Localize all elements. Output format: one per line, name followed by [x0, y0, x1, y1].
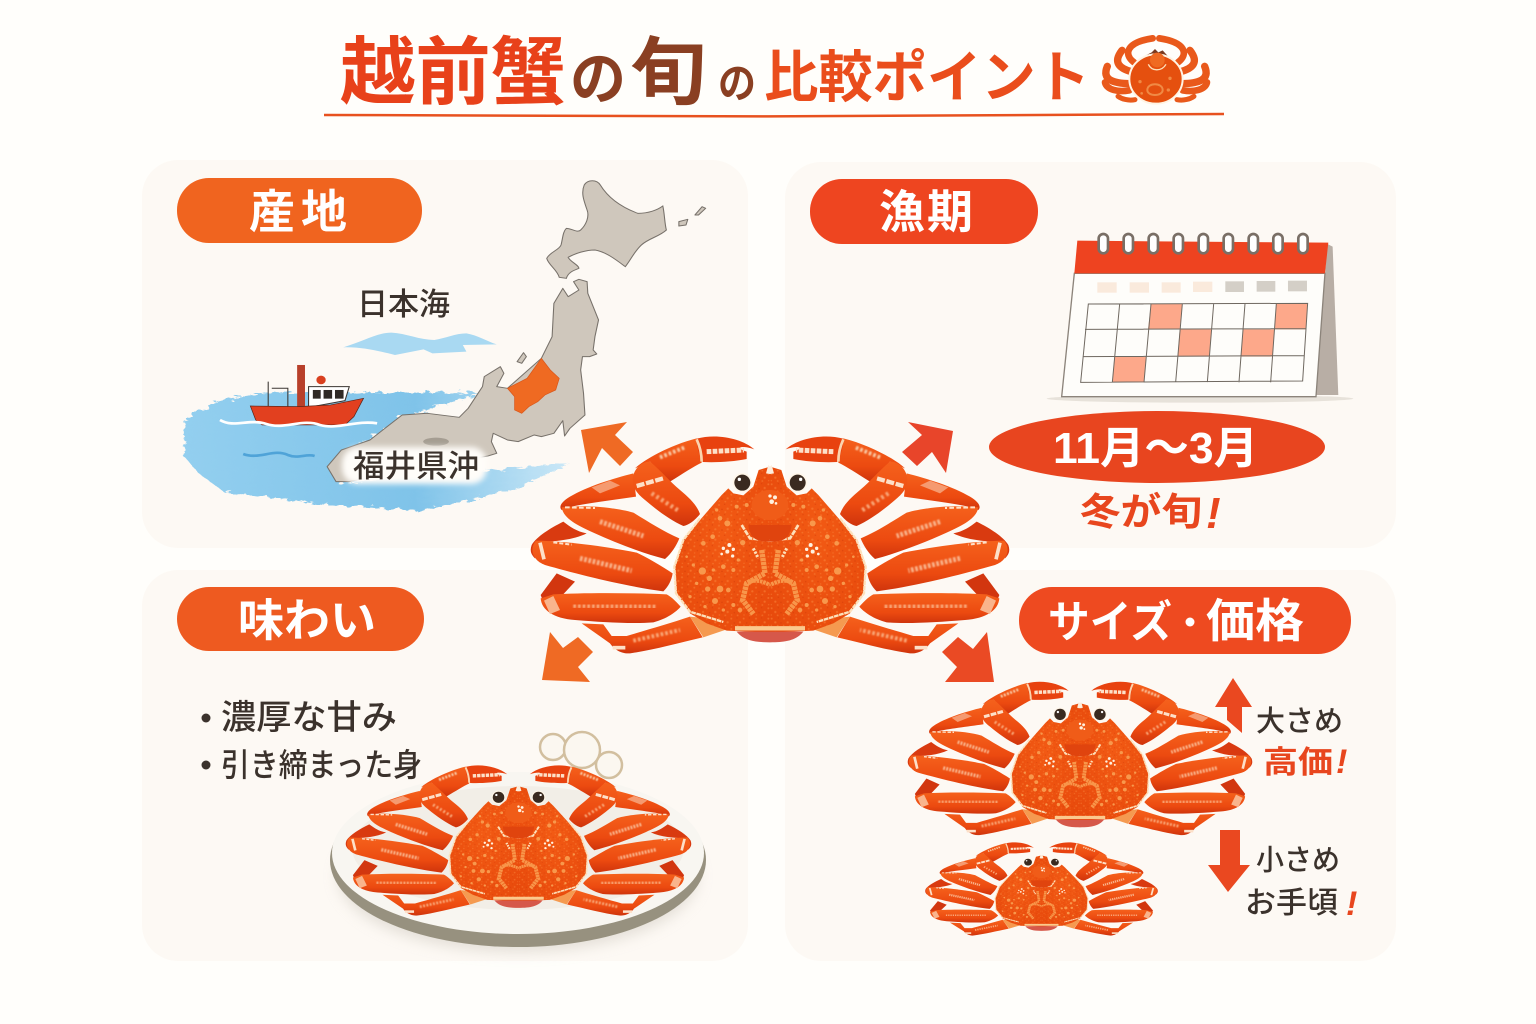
サイズ・価格 pill heading: 価格	[1206, 595, 1304, 647]
ship	[220, 365, 377, 426]
福井県沖 label: 福井県沖	[353, 449, 479, 484]
taste bullet list: 引き締まった身	[221, 747, 422, 783]
arrow: down	[1208, 830, 1250, 892]
title: の	[718, 60, 756, 107]
Hokkaido	[547, 181, 666, 278]
panel: 産地	[142, 160, 748, 548]
date range badge: 11月〜3月	[1053, 424, 1258, 473]
icon: steam	[540, 732, 622, 778]
サイズ・価格 pill heading	[1019, 587, 1351, 654]
日本海 label: 日本海	[357, 287, 450, 322]
冬が旬 text: !	[1206, 489, 1221, 538]
icon: large crab	[908, 682, 1252, 835]
map of Japan with sea and ship	[184, 181, 706, 511]
date range badge	[989, 411, 1325, 483]
taste bullet list	[202, 699, 422, 783]
冬が旬 text: 冬が旬	[1080, 492, 1202, 534]
title	[324, 31, 1224, 116]
title: 越前蟹	[340, 31, 566, 114]
arrow: up	[1215, 678, 1252, 733]
icon: crab on plate	[346, 765, 691, 916]
panel: サイズ・価格	[785, 570, 1396, 961]
large crab label: 高価	[1263, 745, 1333, 780]
small crab label	[1245, 844, 1357, 923]
arrow: to 漁期	[902, 422, 953, 473]
small crab label: お手頃	[1245, 887, 1338, 920]
漁期 pill heading	[810, 179, 1038, 244]
large crab label	[1256, 705, 1347, 781]
Noto island and eastern isles	[517, 207, 706, 363]
サイズ・価格 pill heading: サイズ	[1048, 598, 1172, 647]
冬が旬 text	[1080, 489, 1221, 538]
title: 比較ポイント	[764, 46, 1090, 109]
味わい pill heading	[177, 587, 424, 651]
taste bullet list: 濃厚な甘み	[221, 699, 397, 737]
arrow: to 産地	[581, 422, 633, 473]
wave patches	[343, 333, 497, 355]
arrow: to サイズ・価格	[942, 632, 994, 682]
title: 旬	[630, 31, 706, 114]
産地 pill heading	[177, 178, 422, 243]
漁期 pill heading: 漁期	[879, 186, 973, 238]
large crab label: !	[1336, 743, 1347, 781]
small crab label: 小さめ	[1256, 844, 1340, 877]
icon: calendar	[1047, 234, 1353, 403]
small crab label: !	[1346, 885, 1357, 923]
味わい pill heading: 味わい	[238, 595, 376, 646]
icon: central crab	[531, 437, 1009, 653]
産地 pill heading: 産地	[249, 186, 347, 238]
sea	[184, 393, 570, 511]
title: の	[570, 47, 626, 112]
icon: title crab	[1105, 38, 1207, 104]
panel: 味わい	[142, 570, 748, 961]
arrow: to 味わい	[542, 632, 593, 682]
panel: 漁期	[785, 162, 1396, 548]
large crab label: 大さめ	[1256, 705, 1343, 738]
Fukui highlighted	[507, 358, 559, 413]
Honshu	[327, 279, 599, 482]
icon: small crab	[925, 842, 1158, 936]
icon: plate	[330, 772, 706, 952]
